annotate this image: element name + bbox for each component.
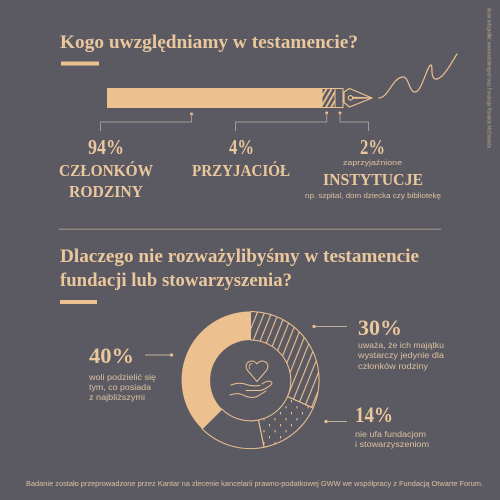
stat: 4% friends [192,135,290,180]
pen barrel: 94% [107,88,322,108]
callout: 30%: członków rodziny [358,362,428,371]
callout: 40%: 40% [89,343,134,368]
connector: 94% [100,112,193,131]
stat: 2% institutions: INSTYTUCJE [323,170,423,189]
callout: 40% [88,343,173,402]
heading underline [60,300,97,304]
callout: 14% [324,402,429,449]
callout: 40%: woli podzielić się [88,373,157,382]
stat: 2% institutions [305,135,441,200]
callout: 14%: i stowarzyszeniom [355,440,429,449]
stat: 4% friends: 4% [229,135,254,159]
stat: 94% family: CZŁONKÓW [59,161,153,180]
callout: 30%: wystarczy jedynie dla [357,351,445,360]
stat: 2% institutions: 2% [360,135,385,159]
callout: 14%: nie ufa fundacjom [355,430,426,439]
stat: 2% institutions: zaprzyjaźnione [343,160,402,167]
stat: 2% institutions: np. szpital, dom dziecka czy bibliotekę [305,193,441,200]
callout: 14%: 14% [355,402,393,427]
heading underline [61,62,99,66]
side credit: Autor Infografiki: www.instalmegraf oraz Fundacja Ronalda McDonalda [486,8,492,148]
footer note: Badanie zostało przeprowadzone przez Kantar na zlecenie kancelarii prawno-podatkowej GWW we współpracy z Fundacją Otwarte Forum. [26,481,483,488]
pen open section: 2% [335,88,343,108]
connector: 4% [236,112,328,131]
stat: 4% friends: PRZYJACIÓŁ [192,161,290,180]
heading: top section: Kogo uwzględniamy w testamencie? [60,32,358,53]
callout: 30% [312,315,445,371]
pen squiggle [379,54,457,98]
segment: 40% solid [182,311,250,429]
callout: 40%: z najbliższymi [89,393,145,402]
stat: 94% family: RODZINY [69,182,143,201]
icon: heart in hand [230,361,272,398]
connector [326,420,347,422]
segment: 30% hatched [250,311,319,408]
stat: 94% family: 94% [88,135,124,159]
divider [59,229,441,230]
pen hatched section: 4% [322,88,335,108]
heading: bottom section: Dlaczego nie rozważylibyśmy w testamencie [60,246,419,267]
callout: 40%: tym, co posiada [89,383,152,392]
segment: remaining outlined [202,409,264,449]
connector [314,326,347,328]
pen chart [107,54,457,108]
heading: bottom section: fundacji lub stowarzyszenia? [60,270,292,291]
connector [145,354,171,356]
connector: 2% [338,112,368,131]
donut chart [182,311,319,449]
callout: 30%: uważa, że ich majątku [358,341,444,350]
heading: bottom section [60,246,419,291]
stat: 94% family [59,135,153,201]
pen nib [344,88,372,107]
callout: 30%: 30% [358,315,402,340]
segment: 14% dotted [258,396,313,447]
